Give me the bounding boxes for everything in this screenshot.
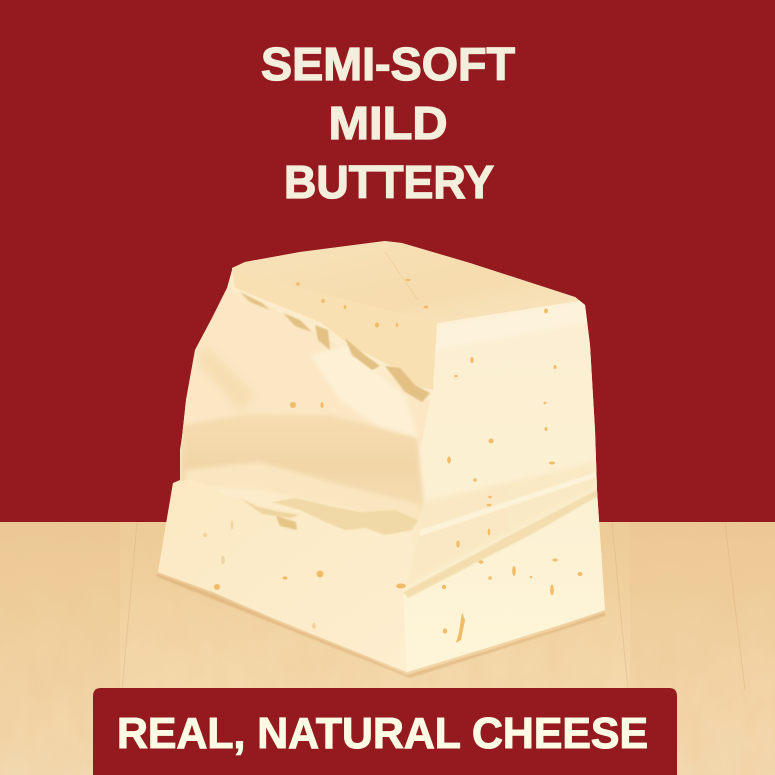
lower torn edge xyxy=(240,498,418,535)
top face xyxy=(232,241,585,323)
title: cheese descriptors xyxy=(261,38,515,208)
background: red wall xyxy=(0,0,775,523)
wood table surface xyxy=(0,522,775,775)
torn surface xyxy=(182,288,227,436)
upper rind strip xyxy=(232,268,437,390)
middle amber band xyxy=(180,414,424,520)
lower left block xyxy=(158,479,415,680)
title: cheese descriptors: MILD xyxy=(328,97,448,149)
footer banner xyxy=(93,688,677,775)
cheese wedge shadow xyxy=(155,574,605,678)
torn edge shadow xyxy=(240,292,430,402)
cheese holes xyxy=(214,279,582,643)
right face xyxy=(403,297,610,680)
cheese wedge illustration xyxy=(158,241,610,680)
right face bands xyxy=(405,462,597,588)
title: cheese descriptors: SEMI-SOFT xyxy=(261,38,515,90)
footer text: REAL, NATURAL CHEESE xyxy=(117,709,648,758)
title: cheese descriptors: BUTTERY xyxy=(284,156,494,208)
